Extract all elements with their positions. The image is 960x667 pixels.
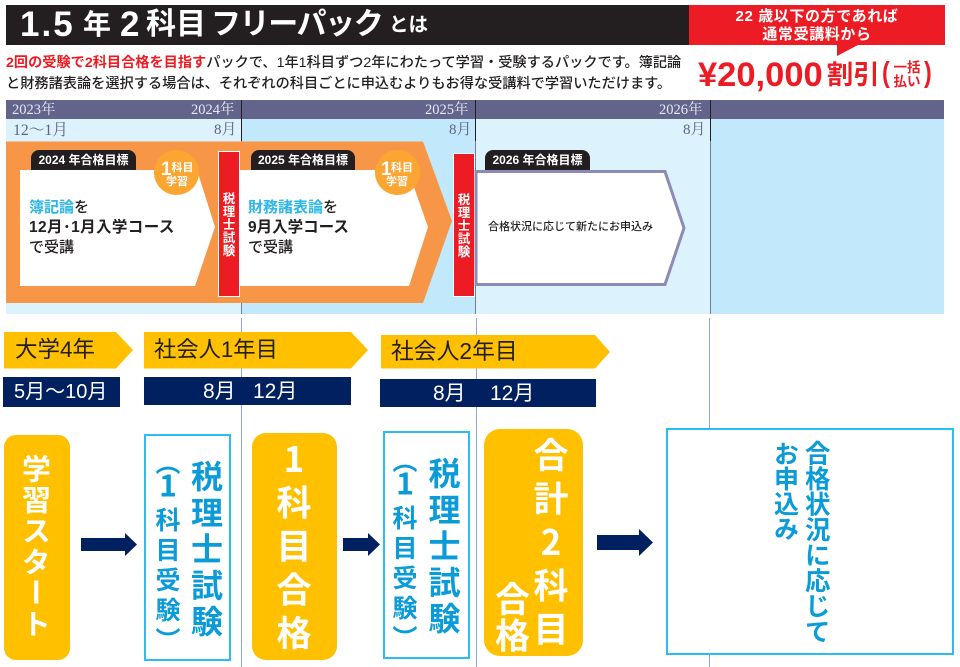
banner callout tail [837, 45, 858, 56]
exam marker 1: 税理士試験 [220, 192, 238, 256]
box: 合格状況に応じてお申込み [666, 428, 954, 654]
year header [6, 100, 944, 119]
title: とは [389, 14, 428, 36]
discount note [882, 57, 932, 89]
intro text [6, 54, 681, 92]
white course panel 2 [240, 170, 428, 286]
subject circle 1: 科目 [172, 162, 194, 174]
stage arrow: 大学4年 [4, 332, 133, 368]
period bar: 5月～10月: 5月～10月 [14, 381, 107, 403]
white course panel 1 [20, 170, 215, 286]
goal badge 2026: 2026 年合格目標 [492, 153, 583, 167]
arrow 1 [81, 533, 137, 556]
period bar: 8月 12月: 8月 [203, 380, 236, 402]
period dividers [240, 100, 242, 141]
stage label: 社会人1年目: 社会人1年目 [154, 337, 278, 362]
timeline panel: 2026年 [659, 102, 702, 118]
box: 税理士試験 2 [383, 430, 470, 658]
period bar: 8月 12月 second [380, 378, 596, 406]
timeline panel: 8月 [449, 122, 472, 138]
title: 科目 [146, 8, 206, 41]
course text 1: 12月･1月入学コース [29, 219, 175, 236]
title: 1.5 [20, 5, 75, 44]
course text 2 [248, 199, 349, 256]
period backgrounds [6, 119, 241, 314]
timeline panel: 8月 [214, 122, 237, 138]
course text 1: で受講 [29, 239, 74, 256]
title bar [6, 5, 689, 45]
title: フリーパック [211, 8, 382, 41]
vertical guide lines [241, 318, 242, 667]
discount amount: ¥20,000割引 [698, 56, 880, 94]
stage arrow: 社会人1年目 [144, 332, 368, 368]
box: 税理士試験 2: 税理士試験 [422, 457, 468, 638]
exam marker 1 [218, 150, 240, 296]
discount banner: 22 歳以下の方であれば [736, 8, 898, 25]
stage label: 大学4年: 大学4年 [15, 336, 95, 362]
discount note: ) [924, 57, 932, 89]
discount banner: 通常受講料から [762, 26, 872, 43]
stage arrow: 社会人2年目 [381, 335, 610, 368]
box: 税理士試験 2: （ 1 科目受験 ） [383, 448, 427, 655]
2026 course text: 合格状況に応じて新たにお申込み [488, 221, 653, 233]
exam marker 2 [452, 153, 474, 296]
goal badge 2025: 2025 年合格目標 [258, 153, 348, 167]
timeline panel: 2024年 [191, 102, 234, 118]
goal badge 2026 [485, 150, 590, 170]
discount note: ( [882, 57, 890, 89]
block: 学習スタート: 学習スタート [16, 454, 58, 640]
discount banner [689, 5, 945, 45]
block: 合計2科目合格: 合格 [487, 580, 538, 654]
intro text: と財務諸表論を選択する場合は、それぞれの科目ごとに申込むよりもお得な受講料で学習いただけます。 [6, 76, 671, 92]
subject circle 2: 科目 [391, 162, 413, 174]
box: 税理士試験 1: （ 1 科目受験 ） [146, 450, 190, 657]
timeline panel: 2025年 [425, 102, 468, 118]
discount note: 一括 [894, 60, 920, 75]
title: 年 [83, 9, 111, 40]
course text 1: 簿記論を [29, 199, 89, 216]
goal badge 2025 [251, 150, 355, 170]
block: 合計2科目合格 [484, 429, 583, 656]
exam marker 2: 税理士試験 [454, 192, 474, 258]
course text 2: で受講 [248, 239, 293, 256]
stage label: 社会人2年目: 社会人2年目 [391, 338, 518, 364]
block: 1科目合格 [252, 433, 337, 660]
arrow 3 [597, 529, 653, 556]
course text 2: 財務諸表論を [248, 199, 338, 216]
timeline panel [6, 100, 944, 314]
block: 合計2科目合格: 合計2科目 [526, 436, 576, 654]
goal badge 2024: 2024 年合格目標 [38, 153, 129, 167]
block: 1科目合格: 1科目合格 [268, 441, 320, 658]
block: 学習スタート [4, 435, 70, 660]
2026 course panel [474, 170, 686, 286]
discount note: 払い [894, 74, 920, 89]
subject circle 1 [154, 150, 199, 195]
box: 合格状況に応じてお申込み: お申込み [768, 441, 804, 541]
box: 税理士試験 1 [144, 434, 231, 661]
period bar: 5月～10月 [3, 377, 120, 406]
box: 合格状況に応じてお申込み: 合格状況に応じて [799, 440, 836, 644]
box: 税理士試験 1: 税理士試験 [184, 460, 230, 641]
period bar: 8月 12月 second: 12月 [490, 382, 534, 404]
period bar: 8月 12月 second: 8月 [433, 382, 466, 404]
subject circle 1: 1 [161, 159, 172, 180]
orange course arrow [6, 142, 452, 303]
title: 2 [120, 5, 139, 44]
subject circle 2 [375, 150, 420, 195]
timeline panel: 8月 [683, 122, 706, 138]
course text 2: 9月入学コース [248, 219, 349, 236]
year labels: 2023年 [12, 102, 56, 118]
intro text: 2回の受験で2科目合格を目指すパックで、1年1科目ずつ2年にわたって学習・受験するパックです。簿記論 [6, 55, 681, 71]
period bar: 8月 12月: 12月 [253, 380, 297, 402]
course text 1 [29, 199, 175, 256]
period bar: 8月 12月 [144, 377, 351, 405]
title [20, 5, 428, 44]
month labels: 12～1月 [13, 122, 68, 138]
goal badge 2024 [31, 150, 136, 170]
subject circle 1: 学習 [166, 176, 188, 188]
subject circle 2: 学習 [386, 176, 408, 188]
subject circle 2: 1 [381, 159, 392, 180]
arrow 2 [343, 533, 380, 556]
